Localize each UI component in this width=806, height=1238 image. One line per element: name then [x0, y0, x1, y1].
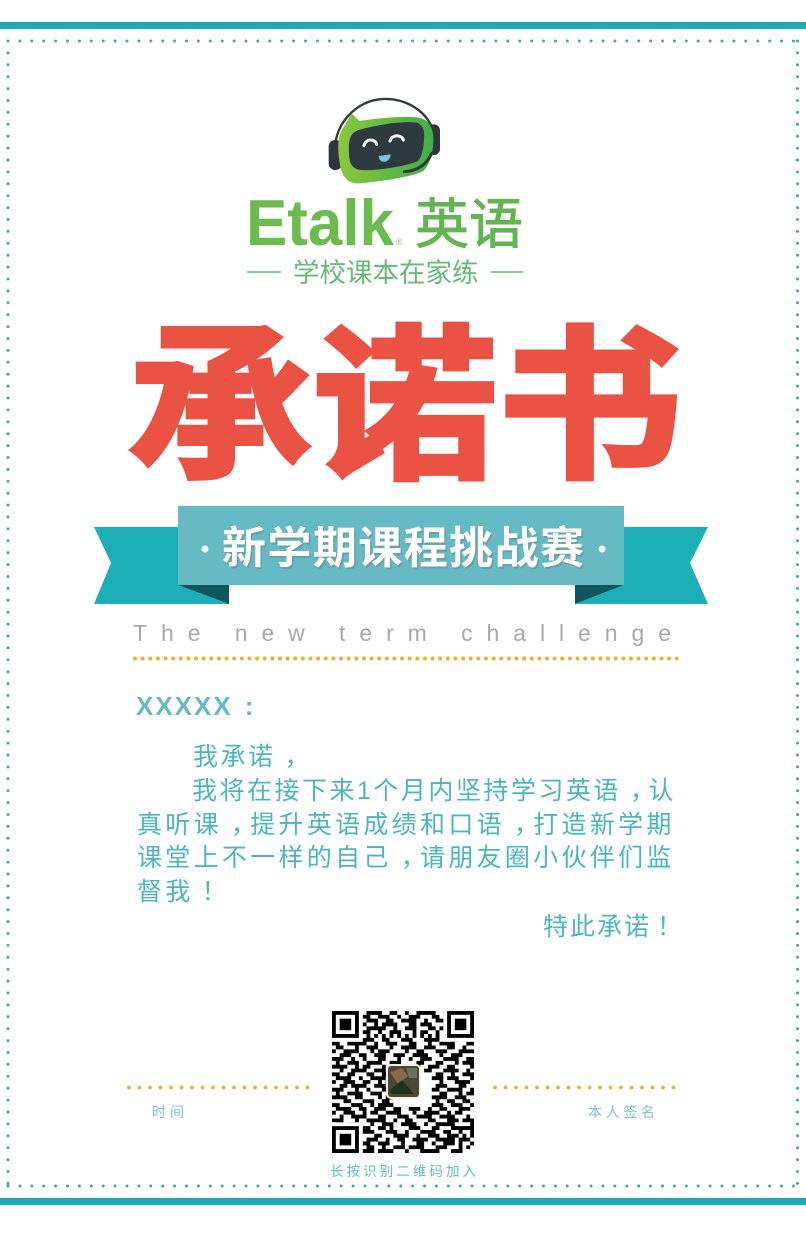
logo: Etalk robot [329, 99, 440, 183]
name signature line: 本人签名 [588, 1104, 655, 1120]
slogan: 学校课本在家练 [293, 258, 478, 288]
left fold [178, 585, 229, 604]
pledge text: 特此承诺！ [543, 913, 684, 941]
pledge text [137, 743, 684, 941]
date signature line: 时间 [152, 1104, 184, 1120]
ribbon banner: 新学期课程挑战赛 [222, 524, 584, 573]
left ribbon tail [94, 527, 229, 604]
pledge text: 课堂上不一样的自己 ，请朋友圈小伙伴们监 [137, 844, 675, 872]
brand name: 英语 [415, 195, 523, 255]
QR caption: 长按识别二维码加入 [330, 1164, 476, 1179]
QR code [332, 1011, 478, 1153]
pledge text: 我承诺 ， [193, 743, 312, 771]
icon: mouth [379, 154, 391, 162]
pledge text: 督我 ！ [137, 878, 230, 906]
icon: dark face [349, 122, 424, 170]
pledge text: 我将在接下来1个月内坚持学习英语 ，认 [192, 777, 676, 805]
brand name: ® [396, 237, 403, 247]
ribbon banner [94, 506, 708, 604]
icon: left ear cup [329, 140, 342, 170]
icon: right ear cup [427, 124, 440, 155]
right fold [575, 585, 624, 604]
QR centre logo [386, 1064, 421, 1099]
title: 承诺书 [128, 316, 682, 501]
icon: microphone arm [404, 153, 432, 172]
icon: headband [335, 99, 432, 145]
pledge text: 真听课 ，提升英语成绩和口语 ，打造新学期 [137, 811, 675, 839]
icon: eyes [364, 136, 403, 146]
brand name [246, 186, 523, 259]
right ribbon tail [575, 527, 708, 604]
brand name: Etalk [246, 186, 395, 259]
icon: green speech bubble head [338, 113, 433, 183]
addressee: XXXXX : [136, 691, 255, 721]
orange dotted divider [135, 656, 677, 660]
English subtitle: The new term challenge [133, 620, 671, 646]
ribbon banner: 新学期课程挑战赛 [224, 526, 586, 575]
